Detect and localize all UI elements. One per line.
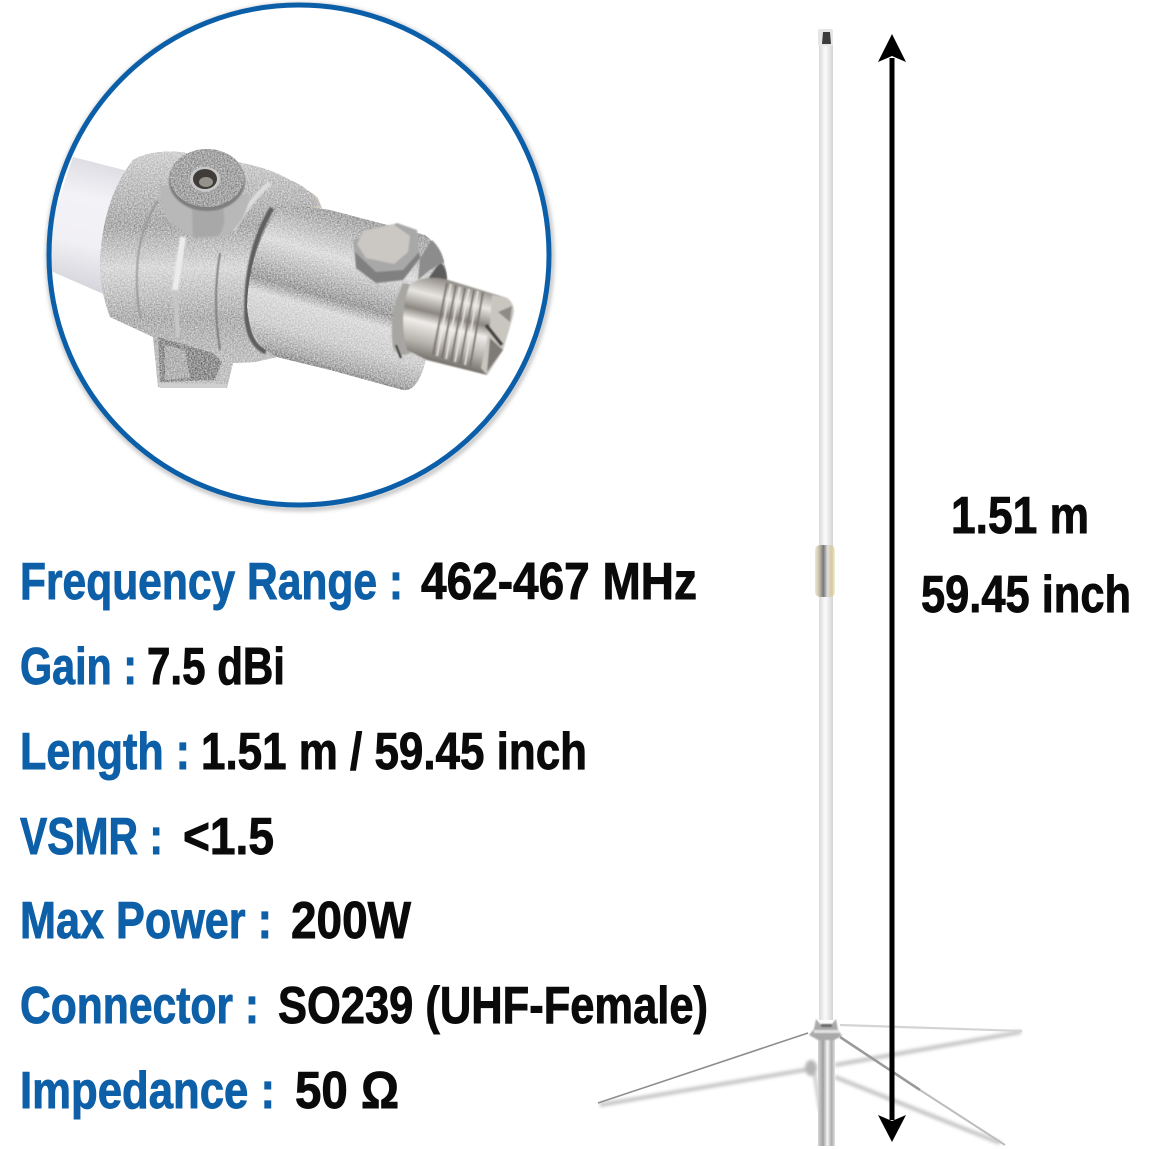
spec: impedance: 50 Ω bbox=[295, 1062, 399, 1120]
spec: connector: SO239 (UHF-Female) bbox=[278, 977, 708, 1035]
spec: frequency range: 462-467 MHz bbox=[421, 553, 697, 611]
height label bbox=[921, 487, 1131, 624]
radials bbox=[598, 1025, 1022, 1145]
spec: frequency range bbox=[20, 553, 697, 611]
spec: VSMR: <1.5 bbox=[183, 808, 274, 866]
spec: connector bbox=[20, 977, 708, 1035]
spec: impedance: Impedance : bbox=[20, 1062, 275, 1120]
spec: connector: Connector : bbox=[20, 977, 259, 1035]
arrow: antenna height bbox=[878, 34, 906, 1142]
spec: VSMR: VSMR : bbox=[20, 808, 163, 866]
radial shadows bbox=[600, 1032, 1021, 1143]
spec: gain: Gain : bbox=[20, 638, 137, 696]
spec: length: 1.51 m / 59.45 inch bbox=[201, 723, 587, 781]
spec: gain bbox=[20, 638, 285, 696]
connector: SO239 socket bbox=[392, 262, 514, 375]
spec: length: Length : bbox=[20, 723, 190, 781]
base pipe bbox=[818, 1036, 835, 1146]
tip cap bbox=[818, 29, 833, 46]
panel: connector detail circle bbox=[40, 5, 552, 509]
bolt bbox=[353, 223, 444, 283]
spec: gain: 7.5 dBi bbox=[147, 638, 285, 696]
height label: 1.51 m bbox=[951, 487, 1089, 545]
base mount bbox=[809, 1019, 842, 1040]
mast bbox=[819, 45, 833, 1020]
spec: length bbox=[20, 723, 587, 781]
mounting lug bbox=[158, 337, 222, 382]
boss with threaded hole bbox=[160, 149, 250, 238]
spec: max power: 200W bbox=[291, 892, 412, 950]
main cylinder bbox=[247, 206, 447, 390]
specification list bbox=[20, 553, 708, 1120]
spec: max power: Max Power : bbox=[20, 892, 272, 950]
photo: antenna base connector bbox=[40, 149, 514, 390]
spec: frequency range: Frequency Range : bbox=[20, 553, 403, 611]
mast joint bbox=[815, 545, 835, 597]
antenna illustration bbox=[598, 29, 1022, 1146]
